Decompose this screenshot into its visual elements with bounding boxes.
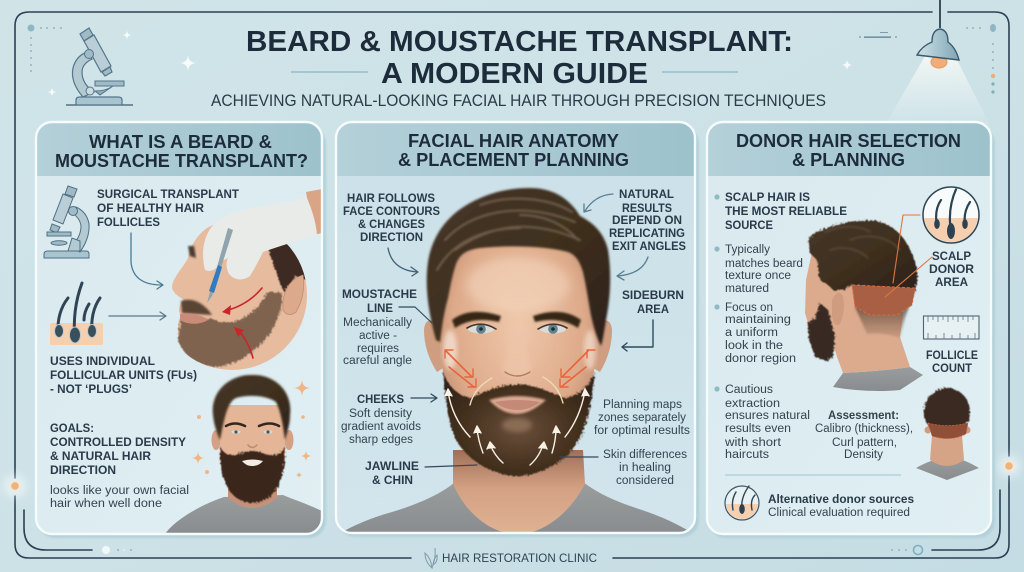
heading: anatomy	[398, 131, 629, 170]
bullet: cautious extraction: extraction	[725, 398, 780, 410]
text: moustache line: LINE	[367, 303, 393, 315]
text: surgical transplant: OF HEALTHY HAIR	[97, 203, 205, 215]
panel header	[707, 122, 991, 176]
text: follicular units: FOLLICULAR UNITS (FUs)	[50, 370, 197, 382]
text: jawline: & CHIN	[372, 475, 413, 487]
lamp	[885, 0, 990, 125]
icon: alternative donor	[724, 486, 760, 522]
text: cheeks: sharp edges	[349, 434, 413, 446]
icon: microscope header	[66, 28, 133, 105]
text: goals: DIRECTION	[50, 465, 116, 477]
bullet: uniform look: Focus on	[725, 302, 773, 314]
text: natural results: EXIT ANGLES	[612, 241, 686, 253]
text: assessment: Curl pattern,	[832, 437, 897, 449]
text: sideburn: SIDEBURN	[622, 290, 684, 302]
text: scalp donor area: AREA	[935, 277, 968, 289]
text: jawline	[365, 461, 419, 487]
text: hair follows contours: & CHANGES	[358, 219, 425, 231]
text: skin differences: in healing	[619, 462, 671, 474]
text: looks natural: hair when well done	[50, 498, 162, 510]
footer brand	[425, 548, 597, 568]
icon: microscope	[44, 186, 89, 258]
bullet: uniform look: a uniform	[725, 327, 778, 339]
panel header	[36, 122, 322, 176]
heading: what is: WHAT IS A BEARD &	[89, 132, 272, 152]
text: scalp donor area: SCALP	[932, 251, 971, 263]
mouth	[489, 396, 546, 414]
bullet: cautious extraction: Cautious	[725, 384, 773, 396]
bullet: scalp hair: SOURCE	[725, 220, 773, 232]
eyes	[468, 324, 494, 334]
text: natural results: RESULTS	[622, 203, 672, 215]
text: goals	[50, 423, 186, 477]
bullet: cautious extraction	[714, 384, 810, 461]
bullet: cautious extraction: ensures natural	[725, 410, 810, 422]
text: planning maps: Planning maps	[603, 399, 682, 411]
arrows: pale growth direction	[445, 377, 589, 465]
ears	[424, 320, 443, 372]
photo: back of head with donor strip	[805, 220, 923, 391]
text: scalp donor area	[929, 251, 975, 289]
text: alternative donor: Clinical evaluation required	[768, 507, 910, 519]
arrow: sideburn	[622, 320, 653, 351]
leader: moustache	[399, 307, 432, 323]
text: scalp donor area: DONOR	[929, 264, 975, 276]
bullet: uniform look: look in the	[725, 340, 783, 352]
text: natural results: DEPEND ON	[612, 215, 682, 227]
bullet: scalp hair: SCALP HAIR IS	[725, 192, 810, 204]
leaders: donor area	[885, 215, 932, 297]
text: cheeks: CHEEKS	[357, 394, 404, 406]
text: alternative donor	[768, 494, 914, 519]
heading: donor: & PLANNING	[792, 150, 905, 170]
bullet: uniform look	[714, 302, 796, 365]
arrows: orange direction	[445, 350, 595, 387]
icon: scalp donor circle	[922, 186, 980, 244]
text: moustache line: MOUSTACHE	[342, 289, 417, 301]
bullet: cautious extraction: results even	[725, 423, 791, 435]
bullet: uniform look: donor region	[725, 353, 796, 365]
divider	[725, 474, 901, 476]
arrow: to face	[131, 233, 163, 289]
heading: anatomy: & PLACEMENT PLANNING	[398, 150, 629, 170]
text: jawline: JAWLINE	[365, 461, 419, 473]
text: looks natural	[50, 485, 189, 510]
text: surgical transplant: SURGICAL TRANSPLANT	[97, 189, 239, 201]
photo: smiling bearded man	[165, 375, 324, 534]
text: skin differences	[603, 449, 687, 487]
text: surgical transplant: FOLLICLES	[97, 217, 160, 229]
text: natural results	[609, 189, 686, 253]
bullet: matches texture: matches beard	[725, 258, 803, 270]
eyebrows	[452, 312, 501, 328]
text: surgical transplant	[97, 189, 239, 229]
icon: hair follicles	[50, 283, 103, 345]
text: natural results: NATURAL	[619, 189, 674, 201]
bullet: cautious extraction: with short	[724, 437, 782, 449]
icon: leaf	[425, 548, 437, 568]
heading: anatomy: FACIAL HAIR ANATOMY	[408, 131, 619, 151]
text: moustache line: Mechanically	[343, 317, 412, 329]
text: goals: & NATURAL HAIR	[50, 451, 152, 463]
title: A MODERN GUIDE	[381, 58, 648, 90]
nose	[505, 361, 529, 375]
text: cheeks	[341, 394, 421, 446]
photo: central portrait	[340, 188, 692, 536]
bullet: scalp hair	[714, 192, 847, 232]
text: hair follows contours: DIRECTION	[360, 232, 423, 244]
text: planning maps: for optimal results	[594, 425, 690, 437]
title: BEARD & MOUSTACHE TRANSPLANT:	[246, 26, 793, 58]
bullet: scalp hair: THE MOST RELIABLE	[725, 206, 847, 218]
arrow: cheeks	[411, 394, 437, 402]
bullet: matches texture: texture once	[725, 270, 791, 282]
icon: ruler	[924, 316, 979, 339]
hair	[427, 188, 610, 346]
panel: anatomy and planning	[336, 122, 699, 537]
text: goals: CONTROLLED DENSITY	[50, 437, 186, 449]
leader: jawline	[425, 465, 477, 467]
arrow: contours	[388, 248, 418, 276]
text: cheeks: Soft density	[349, 408, 412, 420]
text: assessment: Assessment:	[828, 410, 899, 422]
text: follicular units: - NOT ‘PLUGS’	[50, 384, 132, 396]
heading: what is: MOUSTACHE TRANSPLANT?	[55, 151, 308, 171]
text: natural results: REPLICATING	[609, 228, 685, 240]
heading: donor	[736, 131, 961, 170]
text: sideburn: AREA	[637, 304, 669, 316]
text: alternative donor: Alternative donor sources	[768, 494, 914, 506]
text: hair follows contours: HAIR FOLLOWS	[347, 193, 435, 205]
beard	[443, 372, 595, 476]
arrow: follicles to face	[109, 312, 166, 320]
sparkles	[47, 30, 853, 97]
footer brand: HAIR RESTORATION CLINIC	[442, 551, 597, 565]
bullet: matches texture: matured	[725, 283, 769, 295]
text: assessment: Calibro (thickness),	[815, 423, 913, 435]
photo: side profile with gloved hand	[172, 189, 322, 370]
photo: back view small	[916, 388, 979, 480]
text: moustache line: careful angle	[343, 355, 412, 367]
bullet: uniform look: maintaining	[725, 314, 791, 326]
panel: donor selection	[707, 122, 995, 538]
neck	[453, 450, 585, 534]
text: cheeks: gradient avoids	[341, 421, 421, 433]
face	[441, 245, 594, 399]
bullet: cautious extraction: haircuts	[725, 449, 769, 461]
text: hair follows contours: FACE CONTOURS	[343, 206, 440, 218]
text: follicular units: USES INDIVIDUAL	[50, 356, 155, 368]
shirt	[345, 484, 687, 532]
orange sparkles	[191, 379, 312, 479]
text: follicular units	[50, 356, 197, 396]
glowing orb: right frame	[998, 455, 1020, 477]
panel: what is a transplant	[36, 122, 326, 538]
text: follicle count	[926, 350, 978, 375]
text: assessment	[815, 410, 913, 461]
bullet: matches texture: Typically	[725, 244, 770, 256]
text: skin differences: considered	[616, 475, 674, 487]
text: planning maps: zones separately	[598, 412, 686, 424]
panel header	[336, 122, 695, 176]
text: goals: GOALS:	[50, 423, 94, 435]
bullet: matches texture	[714, 244, 803, 295]
glowing orb: left frame	[4, 475, 26, 497]
text: moustache line	[342, 289, 417, 367]
heading: donor: DONOR HAIR SELECTION	[736, 131, 961, 151]
text: hair follows contours	[343, 193, 440, 244]
text: moustache line: requires	[357, 343, 399, 355]
subtitle: ACHIEVING NATURAL-LOOKING FACIAL HAIR THROUGH PRECISION TECHNIQUES	[211, 91, 826, 110]
text: assessment: Density	[844, 449, 883, 461]
text: looks natural: looks like your own facial	[50, 485, 189, 497]
text: skin differences: Skin differences	[603, 449, 687, 461]
text: planning maps	[594, 399, 690, 437]
title	[246, 26, 793, 90]
leader: skin differences	[560, 456, 598, 458]
text: sideburn	[622, 290, 684, 316]
text: follicle count: COUNT	[932, 363, 972, 375]
heading: what is	[55, 132, 308, 171]
text: follicle count: FOLLICLE	[926, 350, 978, 362]
text: moustache line: active -	[359, 330, 397, 342]
arrows: natural results	[584, 194, 648, 280]
